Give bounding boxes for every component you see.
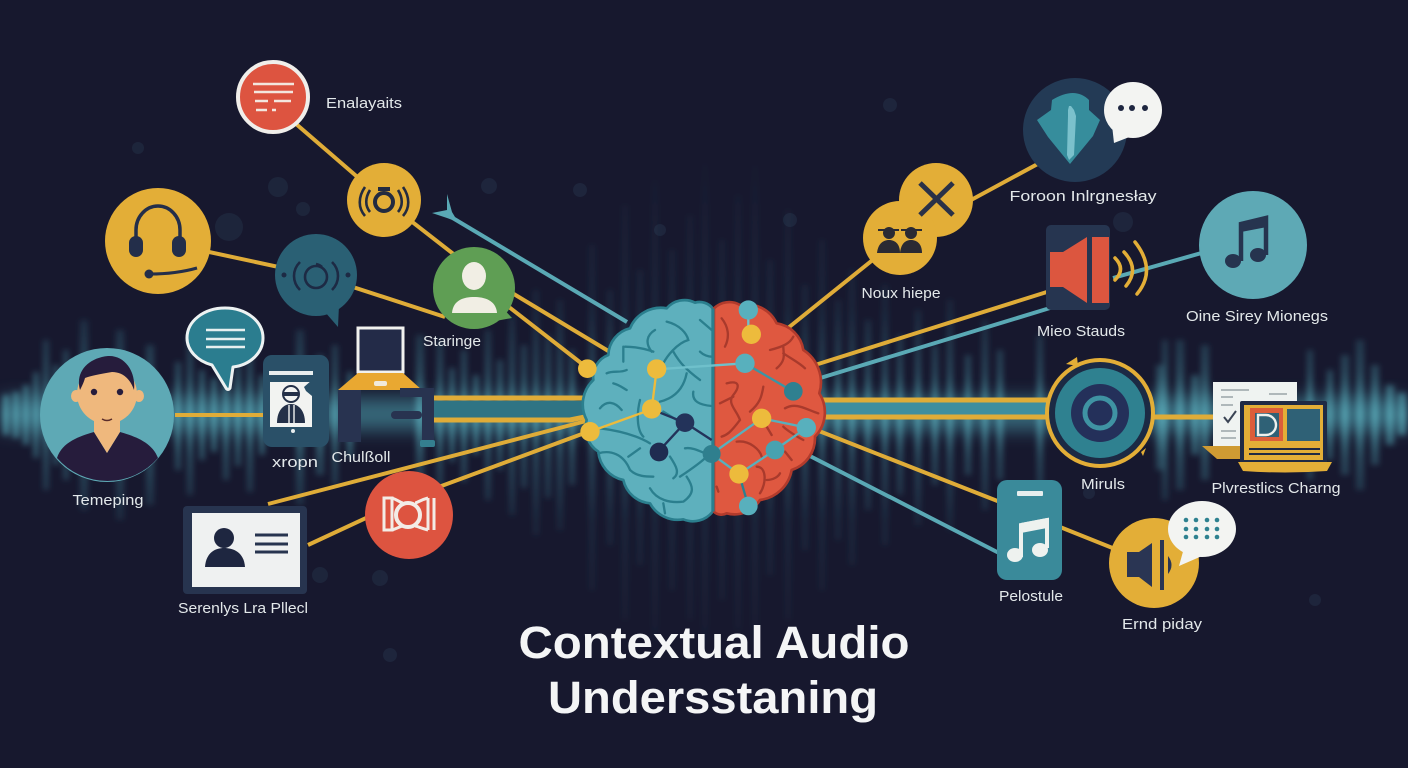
icon: headset circle — [105, 188, 211, 294]
icon: red audio circle — [365, 471, 453, 559]
icon: speaker box with sound waves — [1046, 225, 1147, 310]
brain network nodes — [578, 300, 816, 515]
label: xropn: xropn — [272, 455, 318, 471]
title — [518, 617, 910, 723]
label: Serenlys Lra Pllecl: Serenlys Lra Pllecl — [178, 601, 308, 617]
icon: red document circle — [238, 62, 308, 132]
brain center divide — [710, 308, 717, 512]
audio waveform background — [0, 160, 1408, 650]
connector line: teal arrow — [432, 194, 627, 322]
label: Mieo Stauds: Mieo Stauds — [1037, 324, 1125, 340]
label: Staringe: Staringe — [423, 334, 481, 350]
label: Temeping: Temeping — [72, 493, 144, 509]
label: Oine Sirey Mionegs: Oine Sirey Mionegs — [1186, 309, 1328, 325]
label: Noux hiepe: Noux hiepe — [862, 286, 940, 302]
label: Foroon Infngnestay: Foroon Inlrgnesłay — [1010, 189, 1157, 205]
icon: tablet — [263, 355, 329, 447]
icon: target circle — [1047, 357, 1153, 466]
icon: green user circle — [433, 247, 515, 329]
icon: chat bubble — [187, 308, 263, 390]
label: Plvrestlics Charng: Plvrestlics Charng — [1212, 481, 1340, 497]
label: Miruls: Miruls — [1081, 477, 1125, 493]
icon: music note circle — [1199, 191, 1307, 299]
connector lines: right — [783, 160, 1216, 553]
icon: yellow sound camera circle — [347, 163, 421, 237]
label: Ernd piday: Ernd piday — [1122, 617, 1203, 633]
brain right hemisphere — [714, 302, 825, 515]
icon: laptop on desk — [338, 328, 435, 447]
icon: X and people circles — [863, 163, 973, 275]
label: Pelostule: Pelostule — [999, 589, 1063, 605]
icon: phone with music note — [997, 480, 1062, 580]
brain left hemisphere — [583, 300, 713, 521]
icon: person avatar — [40, 348, 174, 482]
label: Chulboll: Chulßoll — [332, 450, 390, 466]
title: Undersstaning — [548, 672, 878, 723]
icon: ID card — [183, 506, 307, 594]
label: Enalayaits: Enalayaits — [326, 96, 402, 112]
icon: speaker circle with keypad bubble — [1109, 501, 1236, 608]
icon: dark teal audio bubble — [275, 234, 357, 327]
brain right folds — [717, 318, 818, 493]
brain network links — [590, 310, 807, 506]
connector lines: left yellow — [158, 117, 610, 545]
brain — [578, 300, 825, 521]
background network dots — [132, 98, 1321, 662]
brain left folds — [598, 320, 712, 513]
title: Contextual Audio — [518, 617, 910, 668]
icon: dark shield circle with speech bubble — [1023, 78, 1162, 182]
icon: document and laptop — [1202, 382, 1332, 472]
